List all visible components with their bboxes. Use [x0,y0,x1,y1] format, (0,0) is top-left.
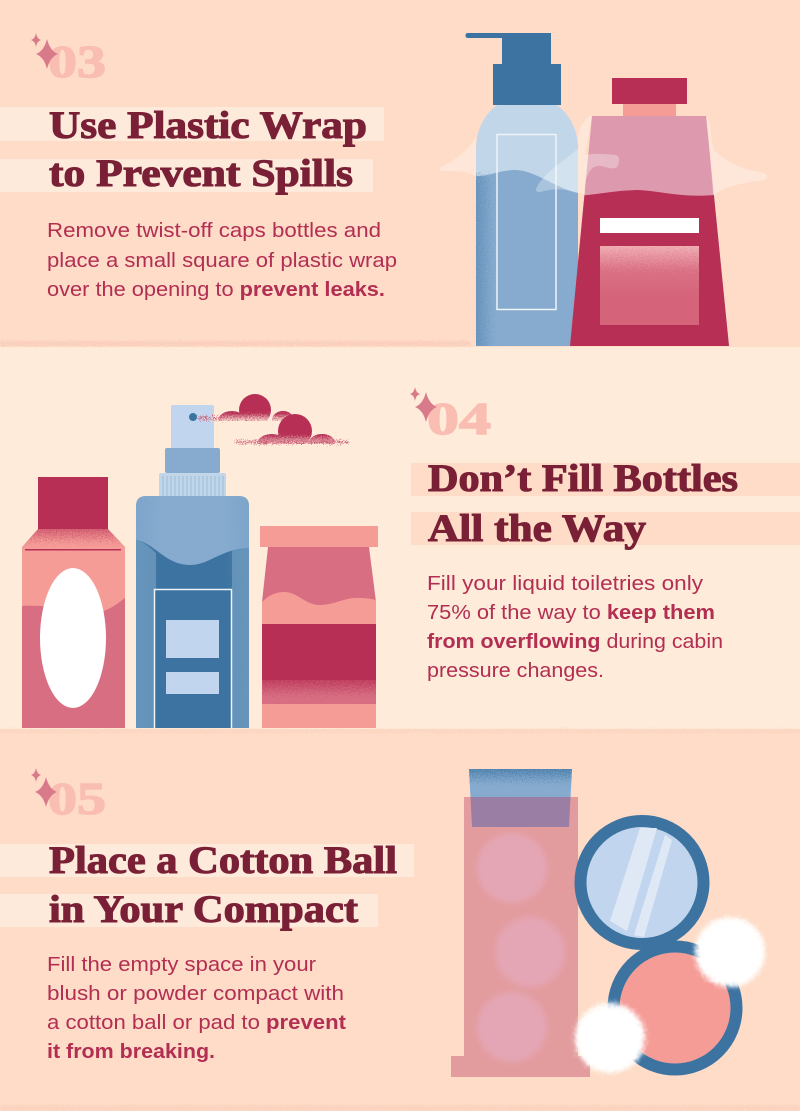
text block: tip 03 body: Remove twist-off caps bottles and [47,219,381,242]
illustration: cotton ball bottle and compact [451,762,765,1077]
tube bottle [565,78,735,348]
text block: tip 03 body: place a small square of plastic wrap [47,249,397,272]
text block: tip 05 body: blush or powder compact with [47,982,344,1005]
text block: tip 03 body [47,219,397,301]
text block: tip 05 body: Fill the empty space in your [47,953,316,976]
heading: don't fill bottles [411,457,800,550]
cotton balls [575,917,765,1073]
tip 03 content [0,33,767,351]
text block: tip 04 body [427,572,723,682]
text block: tip 04 body: 75% of the way to keep them [427,601,715,624]
text block: tip 03 body: over the opening to prevent leaks. [47,278,385,301]
icon: sparkle 03 [31,33,58,69]
tip 04 content [14,387,800,736]
text block: tip 04 body: from overflowing during cabin [427,630,723,653]
heading: don't fill bottles: All the Way [428,507,647,550]
pink bottle with oval label [22,477,125,728]
pump bottle [462,33,578,351]
text block: tip 05 body: a cotton ball or pad to prevent [47,1011,346,1034]
icon: sparkle 04 [410,387,437,422]
text block: tip 04 body: Fill your liquid toiletries only [427,572,704,595]
text block: tip 05 body [47,953,346,1063]
heading: don't fill bottles: Don’t Fill Bottles [428,457,738,500]
tip 05 content [0,762,765,1077]
number 04: 04 [427,393,491,444]
heading: use plastic wrap: Use Plastic Wrap [49,104,367,147]
panel: tip 04 background [0,347,800,729]
number 05: 05 [48,773,106,824]
heading: use plastic wrap: to Prevent Spills [49,152,353,195]
blush compact [614,946,736,1070]
heading: place a cotton ball: Place a Cotton Ball [49,839,397,882]
cotton ball jar [451,762,590,1077]
panel: tip 05 background [0,729,800,1111]
heading: use plastic wrap [0,104,384,195]
heading: place a cotton ball [0,839,414,931]
text block: tip 04 body: pressure changes. [427,659,604,682]
number 03: 03 [48,36,106,87]
illustration: three toiletry bottles with spray [14,394,386,736]
plastic wrap [440,116,767,195]
panel: tip 03 background [0,0,800,347]
illustration: pump bottle and tube with plastic wrap [440,33,767,351]
heading: place a cotton ball: in Your Compact [49,888,358,931]
text block: tip 05 body: it from breaking. [47,1040,215,1063]
icon: sparkle 05 [31,768,57,807]
spray bottle [136,405,249,728]
spray cloud [196,394,350,446]
mirror compact [580,821,704,944]
jar [260,526,378,728]
